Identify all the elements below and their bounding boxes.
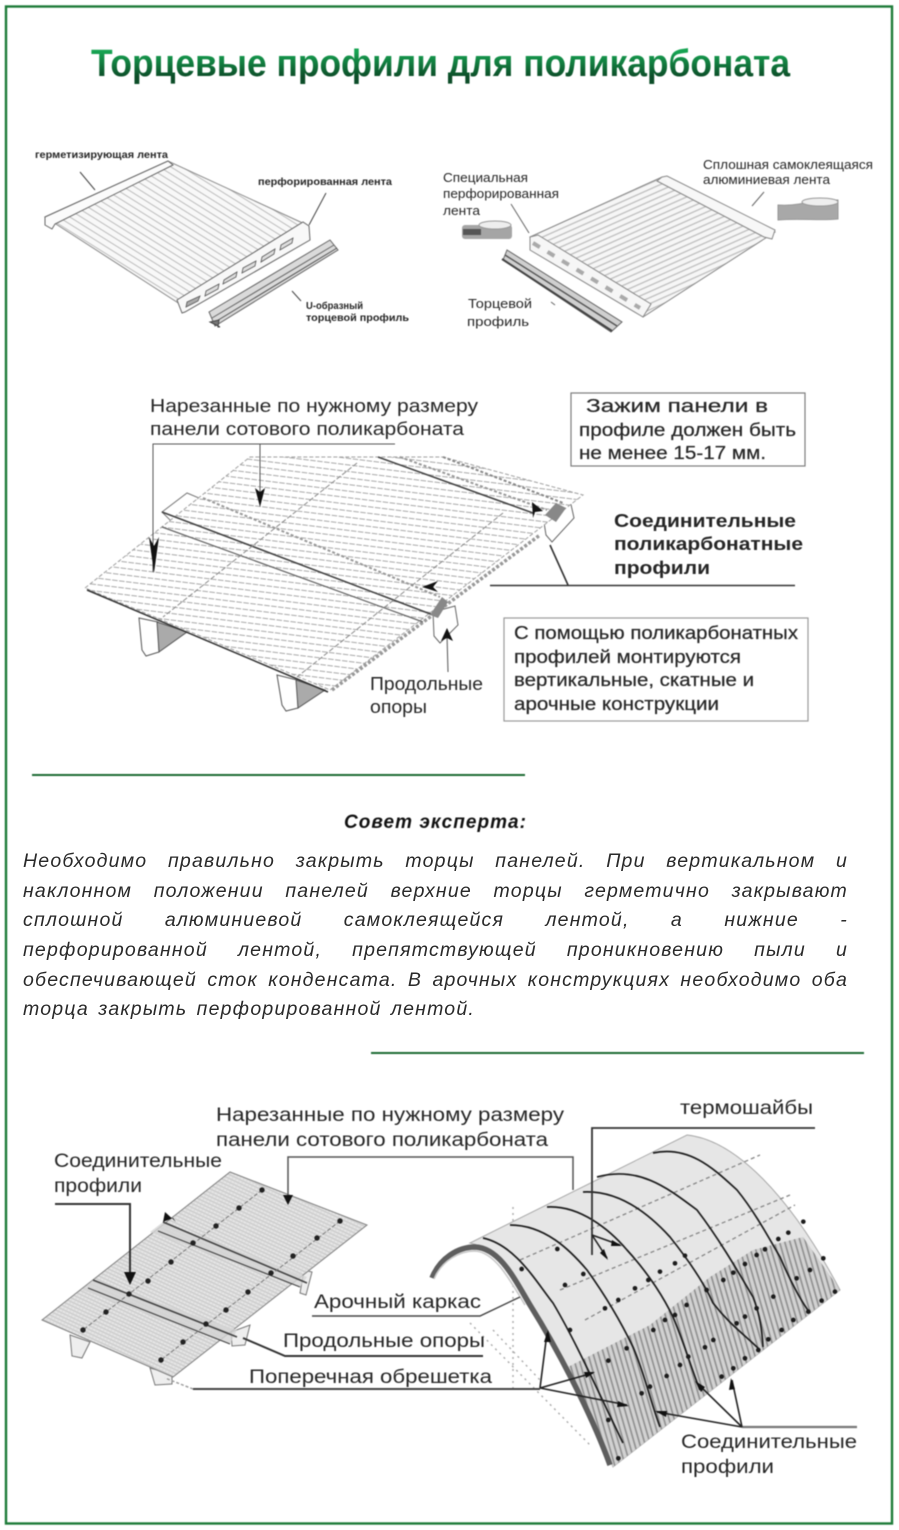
lower divider <box>371 1052 864 1054</box>
labels <box>54 1098 857 1478</box>
sealing tape strip <box>45 161 173 229</box>
profile callout line <box>490 545 795 586</box>
expert advice heading: Совет эксперта: <box>344 812 526 833</box>
labels: панели сотового поликарбоната <box>150 418 465 439</box>
connecting profile one <box>162 498 448 622</box>
profile callout text <box>614 510 803 578</box>
labels: Продольные <box>370 673 483 694</box>
leader lines <box>80 172 326 301</box>
end profile <box>502 250 622 332</box>
labels: Поперечная обрешетка <box>249 1367 492 1388</box>
ribbed lower surface <box>566 1237 840 1467</box>
callout box: usage: профилей монтируются <box>514 646 741 667</box>
connecting profiles <box>88 1222 307 1344</box>
labels and leader lines for lower diagrams <box>54 1098 857 1478</box>
connecting profile two <box>378 457 566 522</box>
labels: Нарезанные по нужному размеру <box>150 395 479 416</box>
labels: перфорированная <box>443 187 559 201</box>
expert advice paragraph: сплошной алюминиевой самоклеящейся лентой, а нижние - <box>23 909 848 931</box>
diagram: flat panel assembly with thermal washers <box>42 1172 367 1385</box>
cross rails <box>163 463 503 677</box>
labels: Продольные опоры <box>283 1331 485 1352</box>
callout box: clamp depth: Зажим панели в <box>586 395 768 416</box>
labels <box>150 395 483 717</box>
labels <box>35 150 409 324</box>
labels: профиль <box>467 315 529 329</box>
cross rails <box>83 1190 340 1360</box>
callout box: usage <box>504 618 808 721</box>
hatched panels <box>85 457 583 690</box>
dashed details on arch <box>520 1155 795 1320</box>
expert advice paragraph: Необходимо правильно закрыть торцы панелей. При вертикальном и <box>23 850 848 872</box>
U-profile <box>209 240 338 327</box>
expert advice paragraph <box>23 850 848 1020</box>
supports <box>70 1270 312 1385</box>
thermal washer dots <box>80 1187 343 1363</box>
arrow heads <box>149 488 543 641</box>
arch surface <box>470 1135 840 1467</box>
diagram: panel with sealing tape and U-profile <box>35 150 409 327</box>
solid tape strip <box>657 176 775 239</box>
labels: Арочный каркас <box>314 1292 481 1313</box>
callout box: clamp depth: не менее 15-17 мм. <box>579 442 766 463</box>
side edge <box>332 535 540 690</box>
profile callout text: поликарбонатные <box>614 533 803 554</box>
labels <box>443 158 873 329</box>
perforated tape roll <box>462 221 512 239</box>
upper divider <box>32 774 525 776</box>
profile callout text: профили <box>614 557 710 578</box>
panel body <box>45 161 307 306</box>
labels: перфорированная лента <box>258 176 392 188</box>
labels: термошайбы <box>680 1098 813 1119</box>
front arch edge <box>432 1247 610 1465</box>
labels: Нарезанные по нужному размеру <box>216 1105 565 1126</box>
title: Торцевые профили для поликарбоната <box>91 43 791 85</box>
perforated strip <box>530 235 651 317</box>
labels: Соединительные <box>54 1151 222 1172</box>
labels: профили <box>54 1176 142 1197</box>
labels: алюминиевая лента <box>703 173 830 187</box>
front edge <box>87 590 328 692</box>
labels: Сплошная самоклеящаяся <box>703 158 873 172</box>
arch profile cross-section <box>434 1251 525 1305</box>
labels: Торцевой <box>468 297 532 311</box>
aluminium tape roll <box>778 198 838 220</box>
connecting arch profiles <box>483 1151 810 1443</box>
callout box: usage: арочные конструкции <box>514 693 719 714</box>
labels: лента <box>443 204 480 218</box>
dots on arch <box>519 1219 837 1461</box>
profile callout text: Соединительные <box>614 510 796 531</box>
connecting profile bands <box>82 1222 307 1344</box>
labels: Специальная <box>443 171 528 185</box>
callout box: usage: вертикальные, скатные и <box>514 669 754 690</box>
labels: профили <box>681 1457 774 1478</box>
arrow heads <box>124 1195 735 1417</box>
labels: герметизирующая лента <box>35 150 168 161</box>
leader lines <box>55 1128 857 1427</box>
diagram: panel with aluminium tape and end profile <box>443 158 873 332</box>
support posts <box>139 493 574 711</box>
panel body <box>530 177 775 317</box>
labels: опоры <box>370 696 427 717</box>
expert advice paragraph: перфорированной лентой, препятствующей проникновению пыли и <box>23 939 848 961</box>
expert advice paragraph: торца закрыть перфорированной лентой. <box>23 998 475 1020</box>
expert advice paragraph: обеспечивающей сток конденсата. В арочных конструкциях необходимо оба <box>23 969 848 991</box>
labels: U-образный <box>306 300 363 312</box>
leader lines with arrows <box>153 444 448 672</box>
panel <box>42 1172 367 1377</box>
labels: Соединительные <box>681 1432 857 1453</box>
perforated strip <box>177 222 310 313</box>
callout box: usage: С помощью поликарбонатных <box>514 622 799 643</box>
dotted guide lines <box>470 1207 590 1445</box>
leader lines <box>511 192 764 305</box>
callout box: clamp depth: профиле должен быть <box>579 419 796 440</box>
expert advice paragraph: наклонном положении панелей верхние торцы герметично закрывают <box>23 880 848 902</box>
diagram: arched polycarbonate construction <box>432 1135 840 1467</box>
labels: панели сотового поликарбоната <box>216 1130 549 1151</box>
diagram: connecting profiles on longitudinal supports <box>85 393 808 721</box>
labels: торцевой профиль <box>306 312 409 324</box>
callout box: clamp depth <box>571 393 805 466</box>
